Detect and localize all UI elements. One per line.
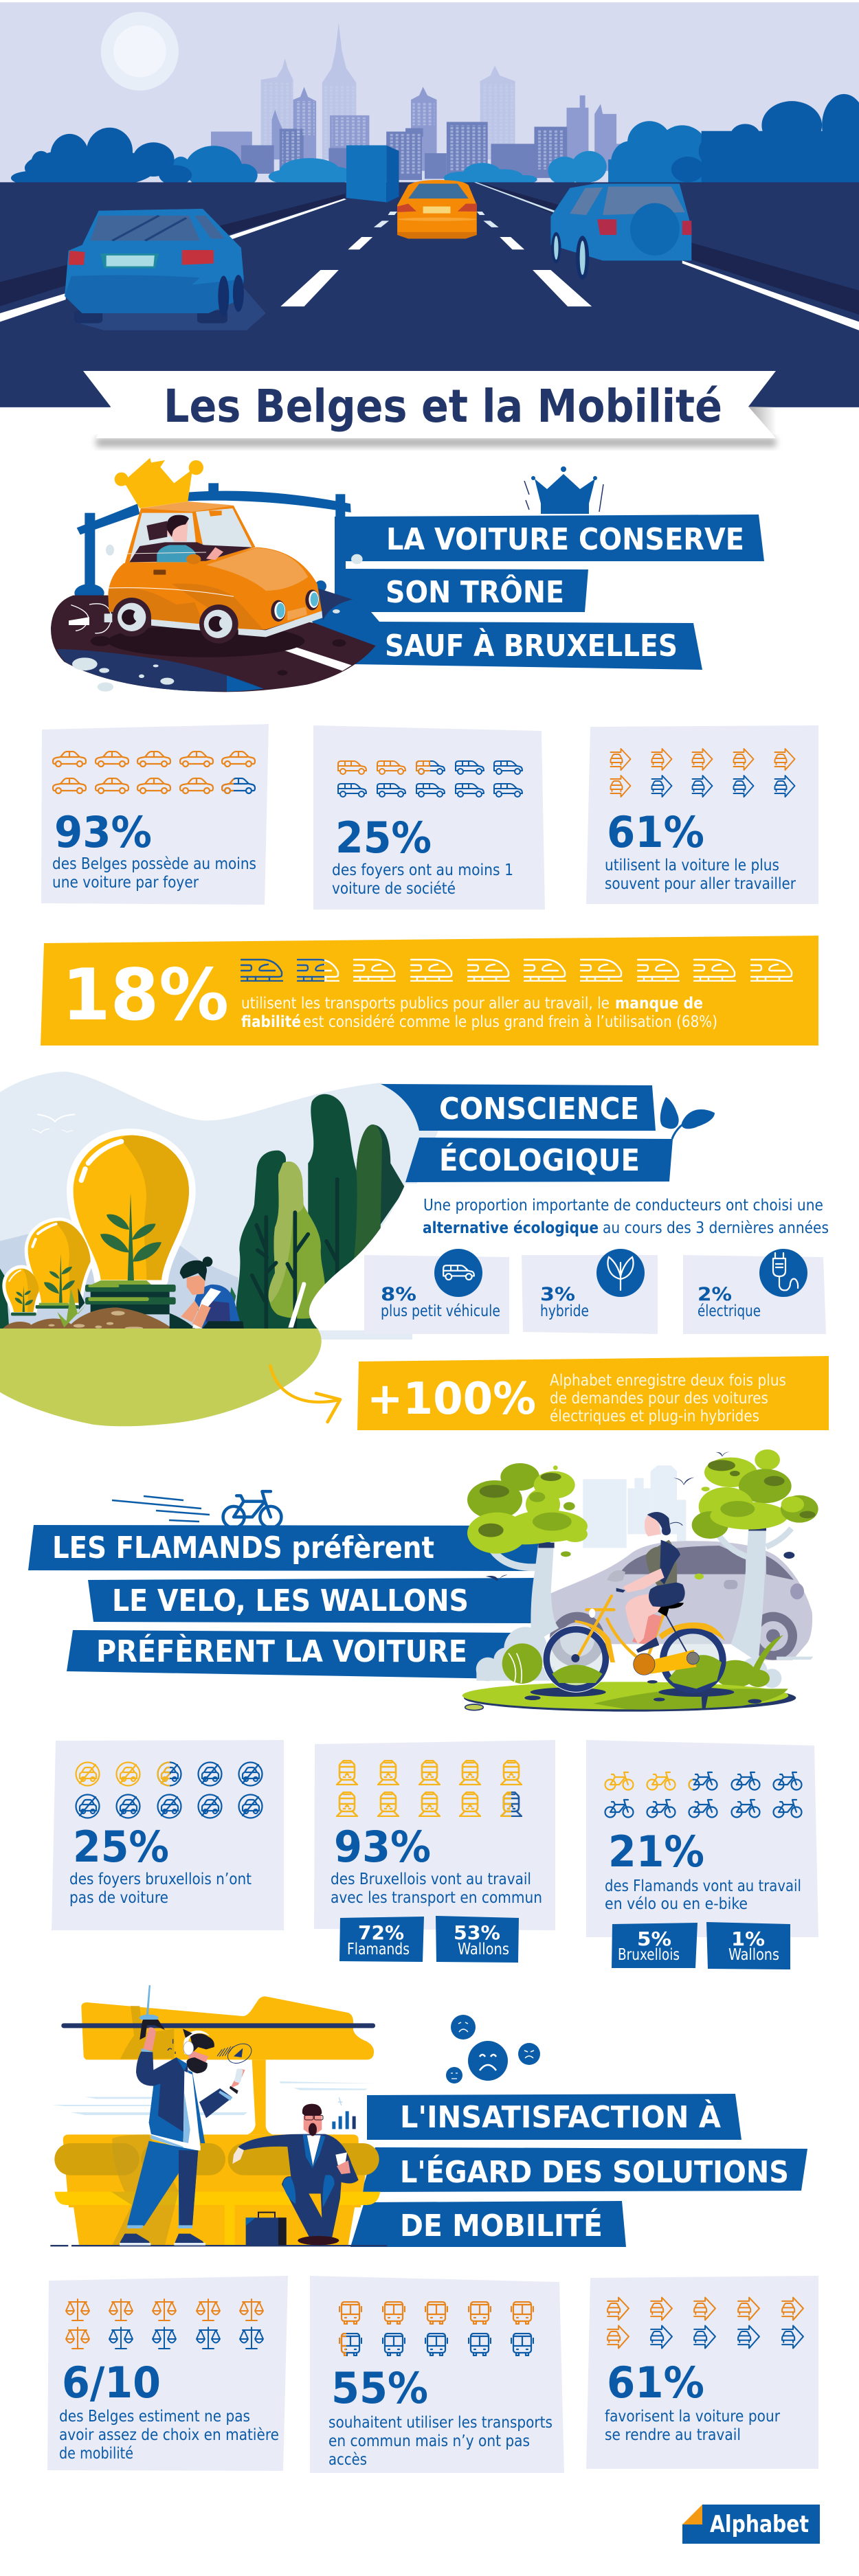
tag: 1% wallons <box>706 1922 790 1969</box>
tag: 53% wallons: Wallons <box>458 1941 509 1958</box>
icons: sad faces <box>446 2015 540 2083</box>
stat card: 6/10 lack of choice: avoir assez de choix en matière <box>59 2426 279 2444</box>
crown on the car <box>115 458 203 508</box>
yellow callout: +100%: Alphabet enregistre deux fois plus <box>550 1372 786 1390</box>
icon: plug in circle <box>759 1249 807 1297</box>
stat card: 61% commute by car: utilisent la voiture le plus <box>605 857 779 874</box>
stat card: 25% company car: 25% <box>335 813 432 863</box>
tag: 72% flamands: 72% <box>358 1921 404 1944</box>
panel: 2% electric: 2% <box>698 1284 732 1305</box>
stat card: 6/10 lack of choice: de mobilité <box>59 2445 133 2463</box>
section heading: la voiture conserve son trône: LA VOITURE CONSERVE <box>386 522 744 557</box>
icons: bus row <box>339 2302 533 2355</box>
grey car <box>550 1541 813 1667</box>
sky blob <box>0 1072 440 1340</box>
stat card: 25% brussels households without car: pas de voiture <box>69 1889 168 1907</box>
yellow callout: 18% public transport: 18% <box>62 954 229 1037</box>
yellow callout: 18% public transport: est considéré comme le plus grand frein à l’utilisation (68%) <box>303 1013 717 1031</box>
section heading: la voiture conserve son trône: SAUF À BRUXELLES <box>385 627 678 664</box>
section heading: conscience écologique <box>381 1084 673 1182</box>
yellow callout: 18% public transport: fiabilité <box>241 1013 301 1031</box>
intro paragraph: Une proportion importante de conducteurs ont choisi une <box>423 1197 823 1214</box>
green ground <box>0 1329 322 1426</box>
cyclist <box>616 1512 685 1653</box>
intro paragraph <box>423 1197 829 1237</box>
road <box>51 545 376 692</box>
tag: 1% wallons: 1% <box>731 1928 765 1950</box>
title banner <box>83 371 777 447</box>
icons: car arrows <box>607 2298 803 2348</box>
stat card: 25% brussels households without car: des foyers bruxellois n’ont <box>69 1871 252 1888</box>
section heading: la voiture conserve son trône <box>335 515 764 670</box>
panel: 2% electric: électrique <box>698 1302 761 1320</box>
bicycle <box>543 1570 725 1692</box>
stat card: 93% own a car <box>41 724 269 905</box>
panel: 3% hybrid: 3% <box>540 1284 575 1305</box>
yellow callout: 18% public transport: utilisent les transports publics pour aller au travail, le <box>241 995 610 1013</box>
stat card: 21% flemish by bike: des Flamands vont au travail <box>605 1877 801 1895</box>
seated man <box>232 2097 359 2245</box>
section heading: l'insatisfaction <box>350 2094 807 2247</box>
stat card: 6/10 lack of choice: 6/10 <box>62 2358 161 2408</box>
ground <box>462 1674 796 1712</box>
stat card: 6/10 lack of choice: des Belges estiment ne pas <box>59 2408 250 2426</box>
illustration: light bulbs, plants and gardener <box>0 1072 458 1426</box>
illustration: cyclist in front of a grey car <box>462 1449 818 1712</box>
stat card: 21% flemish by bike: 21% <box>608 1827 704 1877</box>
stat card: 61% favour the car: favorisent la voiture pour <box>605 2408 780 2426</box>
driver <box>126 515 252 564</box>
tag: 5% bruxellois <box>612 1923 698 1968</box>
stat card: 61% commute by car: souvent pour aller travailler <box>605 875 796 893</box>
yellow callout: 18% public transport <box>41 936 818 1046</box>
section heading: conscience écologique: ÉCOLOGIQUE <box>439 1142 640 1178</box>
icon: bicycle with speed lines <box>112 1491 281 1528</box>
gardener <box>180 1256 244 1329</box>
tag: 72% flamands: Flamands <box>347 1941 410 1958</box>
mountains <box>0 1234 238 1331</box>
plants <box>15 1193 161 1312</box>
stat card: 55% no access to transit: souhaitent utiliser les transports <box>328 2414 553 2432</box>
icons: no-car row <box>76 1763 263 1818</box>
icon: pale sun <box>101 12 179 91</box>
panel: 3% hybrid <box>522 1249 658 1334</box>
stat card: 93% brussels public transport: des Bruxellois vont au travail <box>331 1871 531 1888</box>
yellow callout: +100%: de demandes pour des voitures <box>550 1390 768 1408</box>
stat card: 55% no access to transit: 55% <box>331 2363 428 2413</box>
icons: van row <box>338 761 522 797</box>
section heading: l'insatisfaction: L'INSATISFACTION À <box>400 2099 721 2135</box>
panel: 2% electric <box>683 1249 826 1334</box>
stat card: 25% brussels households without car <box>52 1740 284 1930</box>
stat card: 93% brussels public transport: avec les transport en commun <box>331 1889 542 1907</box>
stat card: 93% brussels public transport: 93% <box>334 1822 431 1872</box>
tag: 53% wallons <box>436 1916 519 1963</box>
stat card: 21% flemish by bike <box>586 1740 818 1969</box>
icons: train front row <box>337 1761 522 1816</box>
section heading: flamands et wallons <box>28 1525 557 1679</box>
stat card: 55% no access to transit: accès <box>328 2451 367 2469</box>
section heading: la voiture conserve son trône: SON TRÔNE <box>386 574 564 610</box>
icons: car arrows <box>610 749 794 797</box>
left blue car <box>65 209 266 330</box>
yellow callout: +100%: électriques et plug-in hybrides <box>550 1408 759 1425</box>
stat card: 61% favour the car: se rendre au travail <box>605 2426 741 2444</box>
logo: Alphabet: Alphabet <box>710 2511 809 2538</box>
white cut-out edge <box>309 1184 458 1331</box>
section heading: l'insatisfaction: L'ÉGARD DES SOLUTIONS <box>400 2154 789 2190</box>
man standing <box>120 1985 255 2246</box>
stat card: 21% flemish by bike: en vélo ou en e-bike <box>605 1895 748 1913</box>
stat card: 25% brussels households without car: 25% <box>73 1822 169 1872</box>
tag: 53% wallons: 53% <box>454 1921 500 1944</box>
car body <box>104 501 322 644</box>
left tree <box>467 1463 588 1644</box>
panel: 8% smaller vehicle <box>364 1249 509 1334</box>
tag: 5% bruxellois: Bruxellois <box>618 1946 680 1964</box>
title: Les Belges et la Mobilité <box>164 380 722 433</box>
stat card: 25% company car <box>313 725 545 909</box>
icons: car row <box>53 752 255 793</box>
orange car <box>397 180 477 238</box>
intro paragraph: au cours des 3 dernières années <box>603 1219 829 1237</box>
stat card: 93% own a car: une voiture par foyer <box>52 874 199 892</box>
stat card: 61% favour the car: 61% <box>607 2358 704 2408</box>
briefcase <box>246 2213 287 2245</box>
icon: car in circle <box>434 1249 482 1297</box>
bushes <box>476 1627 783 1688</box>
birds <box>32 1114 74 1133</box>
city skyline <box>211 23 630 181</box>
tag: 72% flamands <box>339 1917 424 1962</box>
icons: train row <box>241 960 792 981</box>
header illustration: highway and city skyline <box>0 2 859 407</box>
stat card: 25% company car: des foyers ont au moins 1 <box>332 861 513 879</box>
logo: Alphabet <box>682 2505 820 2544</box>
section heading: flamands et wallons: LE VELO, LES WALLONS <box>112 1583 469 1618</box>
icons: bicycle row <box>605 1772 801 1818</box>
section heading: flamands et wallons: LES FLAMANDS préfèrent <box>52 1530 434 1566</box>
section heading: conscience écologique: CONSCIENCE <box>439 1092 639 1127</box>
bus interior <box>50 1996 387 2246</box>
icon: leaf in circle <box>596 1249 645 1297</box>
icon: blue crown <box>524 466 603 514</box>
skyline <box>583 1465 686 1548</box>
arrow <box>270 1366 340 1422</box>
icons: scales row <box>66 2299 263 2349</box>
trees along the horizon <box>11 94 859 190</box>
yellow callout: 18% public transport: manque de <box>615 995 703 1013</box>
section heading: flamands et wallons: PRÉFÈRENT LA VOITURE <box>96 1633 467 1669</box>
stat card: 93% brussels public transport <box>314 1740 555 1963</box>
right blue SUV <box>550 183 691 280</box>
stat card: 55% no access to transit: en commun mais n’y ont pas <box>328 2432 530 2450</box>
stat card: 6/10 lack of choice <box>47 2276 288 2471</box>
stat card: 25% company car: voiture de société <box>332 880 456 898</box>
truck <box>346 145 399 203</box>
tag: 1% wallons: Wallons <box>728 1946 779 1964</box>
stat card: 93% own a car: des Belges possède au moins <box>52 855 256 873</box>
section heading: l'insatisfaction: DE MOBILITÉ <box>400 2207 603 2244</box>
right tree <box>673 1449 818 1662</box>
trees <box>0 1094 405 1329</box>
panel: 3% hybrid: hybride <box>540 1302 589 1320</box>
stat card: 93% own a car: 93% <box>54 807 152 857</box>
stat card: 61% commute by car: 61% <box>607 807 704 857</box>
intro paragraph: alternative écologique <box>423 1219 599 1237</box>
icon: sprout leaf <box>660 1097 715 1139</box>
yellow callout: +100% <box>357 1356 829 1430</box>
fence <box>74 483 351 602</box>
illustration: commuters on a bus <box>50 1985 387 2246</box>
tag: 5% bruxellois: 5% <box>637 1928 671 1950</box>
stat card: 61% favour the car <box>586 2276 818 2469</box>
panel: 8% smaller vehicle: 8% <box>381 1284 416 1305</box>
pots and soil <box>2 1280 196 1329</box>
panel: 8% smaller vehicle: plus petit véhicule <box>381 1302 500 1320</box>
road surface <box>0 182 859 407</box>
yellow callout: +100%: +100% <box>367 1374 536 1425</box>
illustration: man driving an orange car with a crown <box>51 458 376 692</box>
bulbs <box>5 1136 189 1312</box>
stat card: 55% no access to transit <box>310 2276 564 2473</box>
stat card: 61% commute by car <box>586 725 818 904</box>
